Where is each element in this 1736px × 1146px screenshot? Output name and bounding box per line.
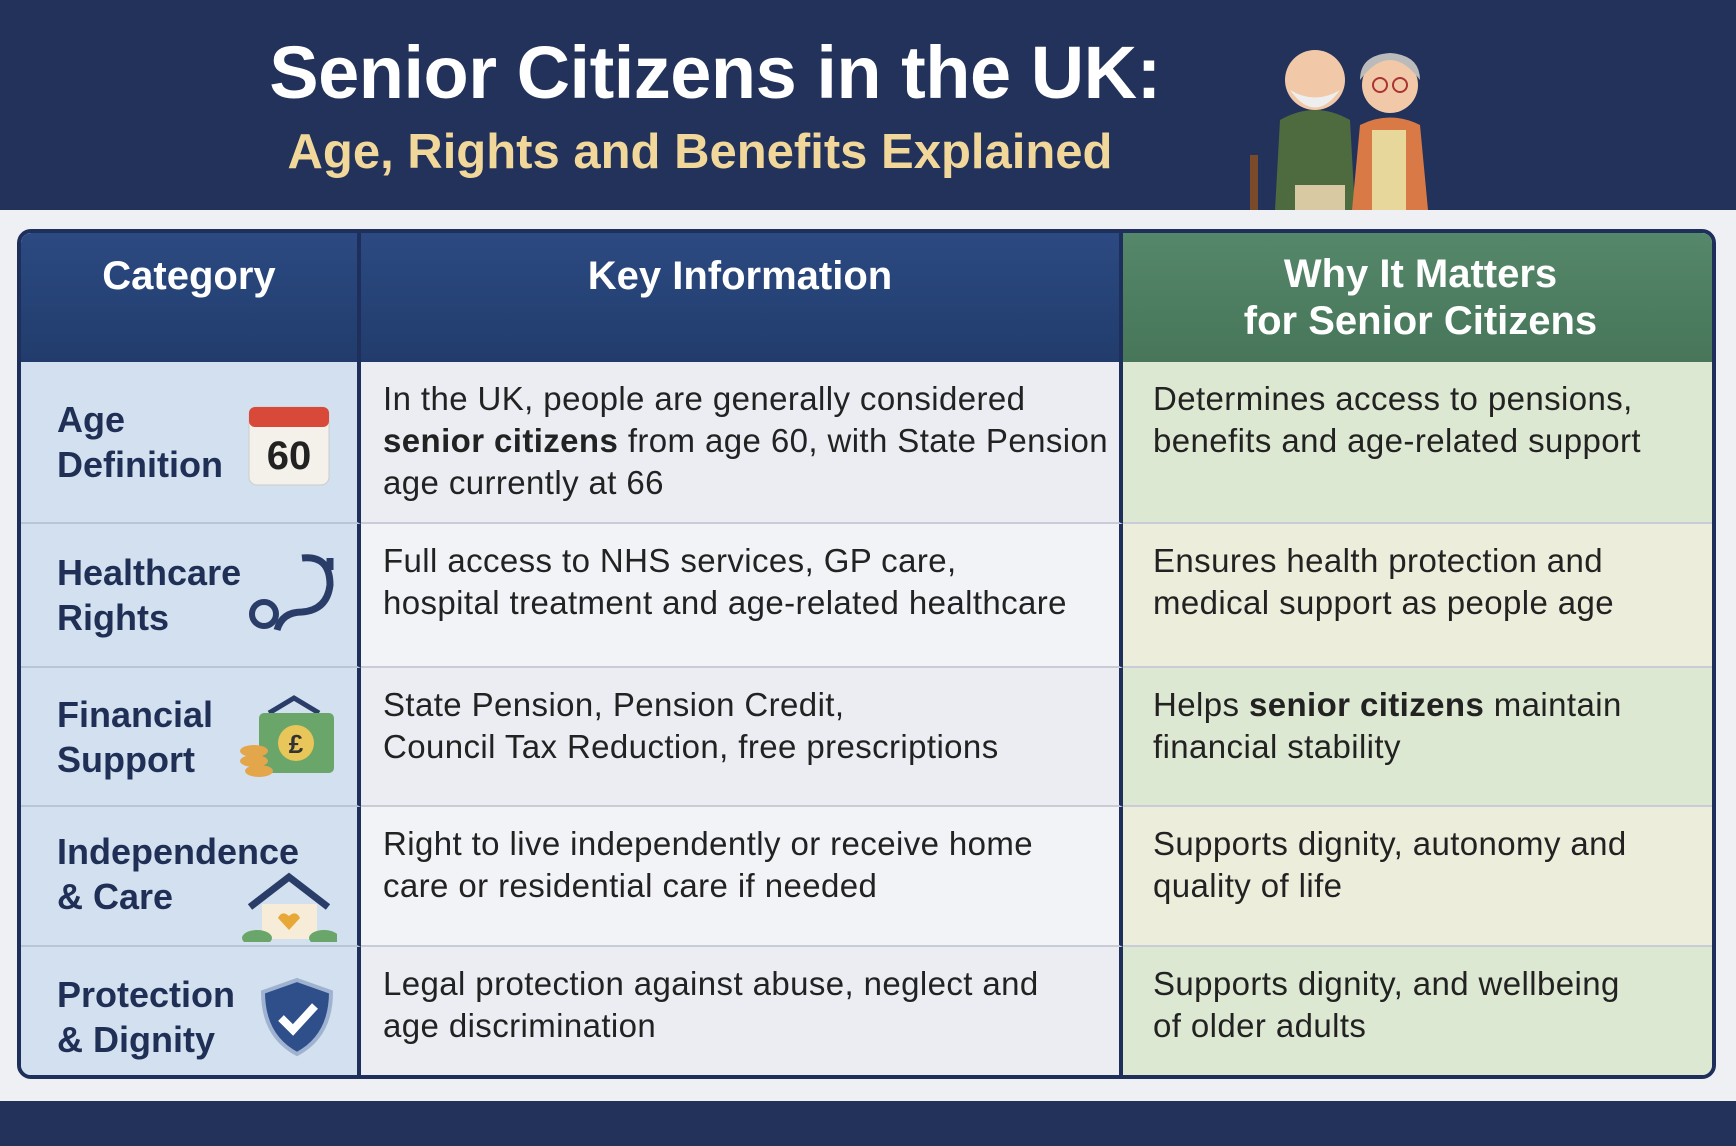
icon: money bbox=[240, 695, 334, 777]
table: age currently at 66 bbox=[383, 464, 664, 501]
table: & Dignity bbox=[57, 1019, 215, 1060]
table: & Care bbox=[57, 876, 173, 917]
column header: why it matters bbox=[1123, 233, 1718, 362]
table: Council Tax Reduction, free prescriptions bbox=[383, 728, 999, 765]
table: Supports dignity, autonomy and bbox=[1153, 825, 1627, 862]
icon: shield bbox=[261, 978, 333, 1056]
table: Age bbox=[57, 399, 125, 440]
table: senior citizens from age 60, with State Pension bbox=[383, 422, 1108, 459]
icon: house with heart bbox=[242, 872, 337, 942]
table: Supports dignity, and wellbeing bbox=[1153, 965, 1620, 1002]
row: healthcare rights bbox=[21, 524, 1712, 668]
table: Helps senior citizens maintain bbox=[1153, 686, 1622, 723]
icon: stethoscope bbox=[249, 554, 334, 631]
table: Ensures health protection and bbox=[1153, 542, 1603, 579]
icon: calendar 60: 60 bbox=[267, 434, 311, 478]
row: protection & dignity bbox=[21, 947, 1712, 1075]
table: age discrimination bbox=[383, 1007, 656, 1044]
table: Healthcare bbox=[57, 552, 241, 593]
table: Protection bbox=[57, 974, 235, 1015]
table: financial stability bbox=[1153, 728, 1401, 765]
table: benefits and age-related support bbox=[1153, 422, 1641, 459]
table: State Pension, Pension Credit, bbox=[383, 686, 844, 723]
column header: why it matters: Why It Matters bbox=[1284, 252, 1557, 296]
icon: calendar 60 bbox=[248, 406, 330, 486]
column header: category: Category bbox=[102, 254, 276, 298]
table: Financial bbox=[57, 694, 213, 734]
title: Senior Citizens in the UK: bbox=[269, 31, 1161, 114]
table: Legal protection against abuse, neglect and bbox=[383, 965, 1039, 1002]
row: independence & care bbox=[21, 807, 1712, 947]
table: Right to live independently or receive home bbox=[383, 825, 1033, 862]
column header: key information bbox=[361, 233, 1123, 362]
table: Definition bbox=[57, 444, 223, 485]
table: care or residential care if needed bbox=[383, 867, 877, 904]
table: In the UK, people are generally considered bbox=[383, 380, 1025, 417]
column header: category bbox=[21, 233, 361, 362]
column header: why it matters: for Senior Citizens bbox=[1244, 298, 1597, 342]
table: hospital treatment and age-related healthcare bbox=[383, 584, 1067, 621]
table bbox=[17, 229, 1716, 1079]
table: Full access to NHS services, GP care, bbox=[383, 542, 957, 579]
subtitle: Age, Rights and Benefits Explained bbox=[288, 125, 1112, 179]
table: Rights bbox=[57, 597, 169, 638]
row: age definition bbox=[21, 362, 1712, 524]
table: medical support as people age bbox=[1153, 584, 1614, 621]
illustration: elderly couple bbox=[1250, 50, 1428, 210]
table: Independence bbox=[57, 831, 299, 872]
table: Determines access to pensions, bbox=[1153, 380, 1633, 417]
column header: key information: Key Information bbox=[588, 254, 892, 298]
table: Support bbox=[57, 738, 195, 780]
row: financial support bbox=[21, 668, 1712, 807]
footer bar bbox=[0, 1101, 1736, 1146]
icon: money: £ bbox=[289, 728, 304, 758]
header banner bbox=[0, 0, 1736, 210]
table: quality of life bbox=[1153, 867, 1342, 904]
table: of older adults bbox=[1153, 1007, 1366, 1044]
